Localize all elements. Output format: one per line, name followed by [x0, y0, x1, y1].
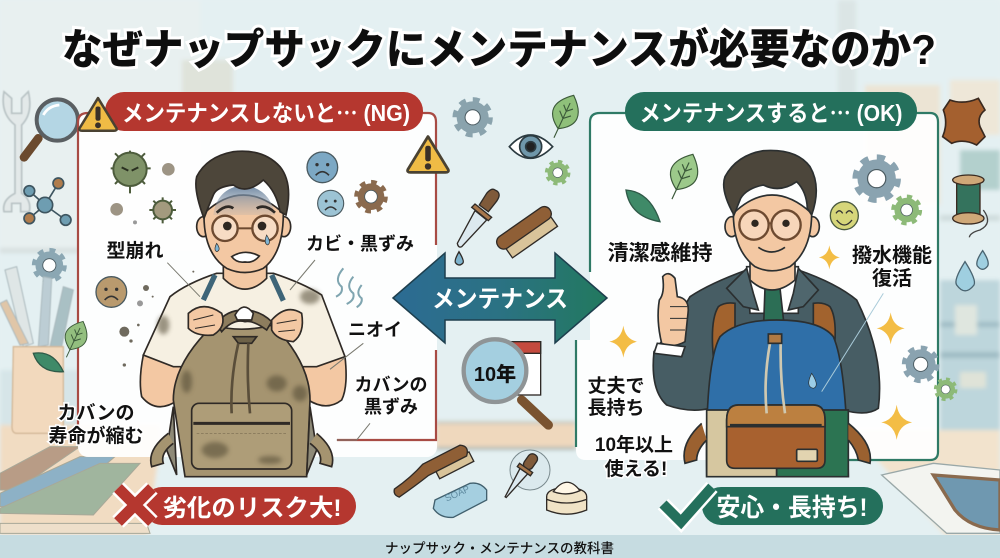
right warning triangle: [408, 137, 448, 172]
icon: water drops: [956, 251, 988, 291]
OK labels: [587, 241, 932, 480]
icon: small gear: [547, 162, 569, 184]
center arrow: maintenance: メンテナンス: [432, 286, 568, 313]
panel: NG: [78, 113, 437, 457]
callout: OK result: 安心・長持ち!: [716, 494, 868, 522]
panel: OK: [576, 113, 938, 460]
callout: NG result: 劣化のリスク大!: [162, 495, 342, 522]
icon: thread spool: [953, 175, 988, 237]
icon: smile: [830, 202, 858, 230]
icon: small dropper: [499, 450, 550, 502]
icon: wrench: [3, 92, 30, 212]
icon: sparkles: [609, 245, 912, 440]
icon: leaves on panel edge: [33, 317, 93, 372]
NG labels: ニオイ: [348, 320, 402, 340]
NG labels: カビ・黒ずみ: [306, 233, 414, 254]
NG labels: 型崩れ: [106, 240, 164, 262]
icon: magnifier: [24, 99, 78, 157]
icon: leaves: [626, 149, 705, 222]
icon: molecule: [24, 178, 71, 225]
heading: OK: メンテナンスすると… (OK): [640, 94, 902, 128]
OK labels: 丈夫で: [587, 375, 645, 397]
left warning triangle: [79, 98, 117, 131]
NG labels: カバンの: [58, 402, 134, 424]
OK labels: 使える!: [605, 458, 667, 480]
left workshop props: [0, 92, 150, 533]
OK labels: 長持ち: [587, 397, 645, 419]
icon: soap: SOAP: [443, 484, 471, 503]
icon: cream jar: [547, 482, 587, 514]
stains on shirt and bag: [157, 289, 320, 464]
title: なぜナップサックにメンテナンスが必要なのか?: [62, 26, 936, 73]
OK illustration: [609, 98, 1000, 533]
man: NG: [140, 151, 346, 477]
icon: smell waves: [336, 268, 362, 307]
icon: gear left: [34, 250, 65, 281]
NG labels: [48, 233, 427, 447]
pens in cup: [0, 267, 73, 433]
books on desk: [0, 447, 150, 533]
icon: soap: [433, 483, 487, 517]
icon: virus: [110, 151, 176, 223]
callout: NG result: [118, 487, 356, 525]
center illustrations: [389, 90, 587, 517]
man: OK: [653, 150, 880, 477]
icon: sad faces: [96, 152, 344, 307]
NG illustration: [33, 151, 386, 477]
icon: broken gear: [356, 182, 386, 211]
OK labels: 10年以上: [595, 433, 673, 456]
center arrow: maintenance: [393, 253, 607, 343]
pointer line: [822, 293, 883, 392]
icon: magnifier and calendar: [464, 339, 548, 425]
icon: gears: [856, 158, 956, 400]
magnifier label: 10年: [474, 362, 516, 386]
icon: leaf center: [542, 90, 585, 143]
footer: [0, 535, 1000, 558]
OK labels: 清潔感維持: [608, 241, 712, 265]
icon: brush: [494, 204, 560, 261]
OK labels: 撥水機能: [852, 244, 932, 267]
heading: NG: メンテナンスしないと… (NG): [122, 94, 410, 128]
icon: lower brush: [389, 443, 474, 500]
pointer lines: [167, 260, 370, 440]
icon: leather: [943, 98, 985, 145]
NG labels: 黒ずみ: [364, 397, 418, 417]
callout: OK result: [663, 487, 883, 525]
mold dots: [119, 220, 194, 367]
fabric swatch on desk: [882, 463, 1000, 533]
OK labels: 復活: [872, 267, 912, 290]
icon: eye: [509, 135, 553, 158]
icon: gear center: [455, 100, 490, 135]
footer: ナップサック・メンテナンスの教科書: [385, 541, 614, 556]
NG labels: 寿命が縮む: [48, 424, 144, 447]
icon: dropper: [455, 189, 499, 265]
NG labels: カバンの: [355, 375, 427, 395]
